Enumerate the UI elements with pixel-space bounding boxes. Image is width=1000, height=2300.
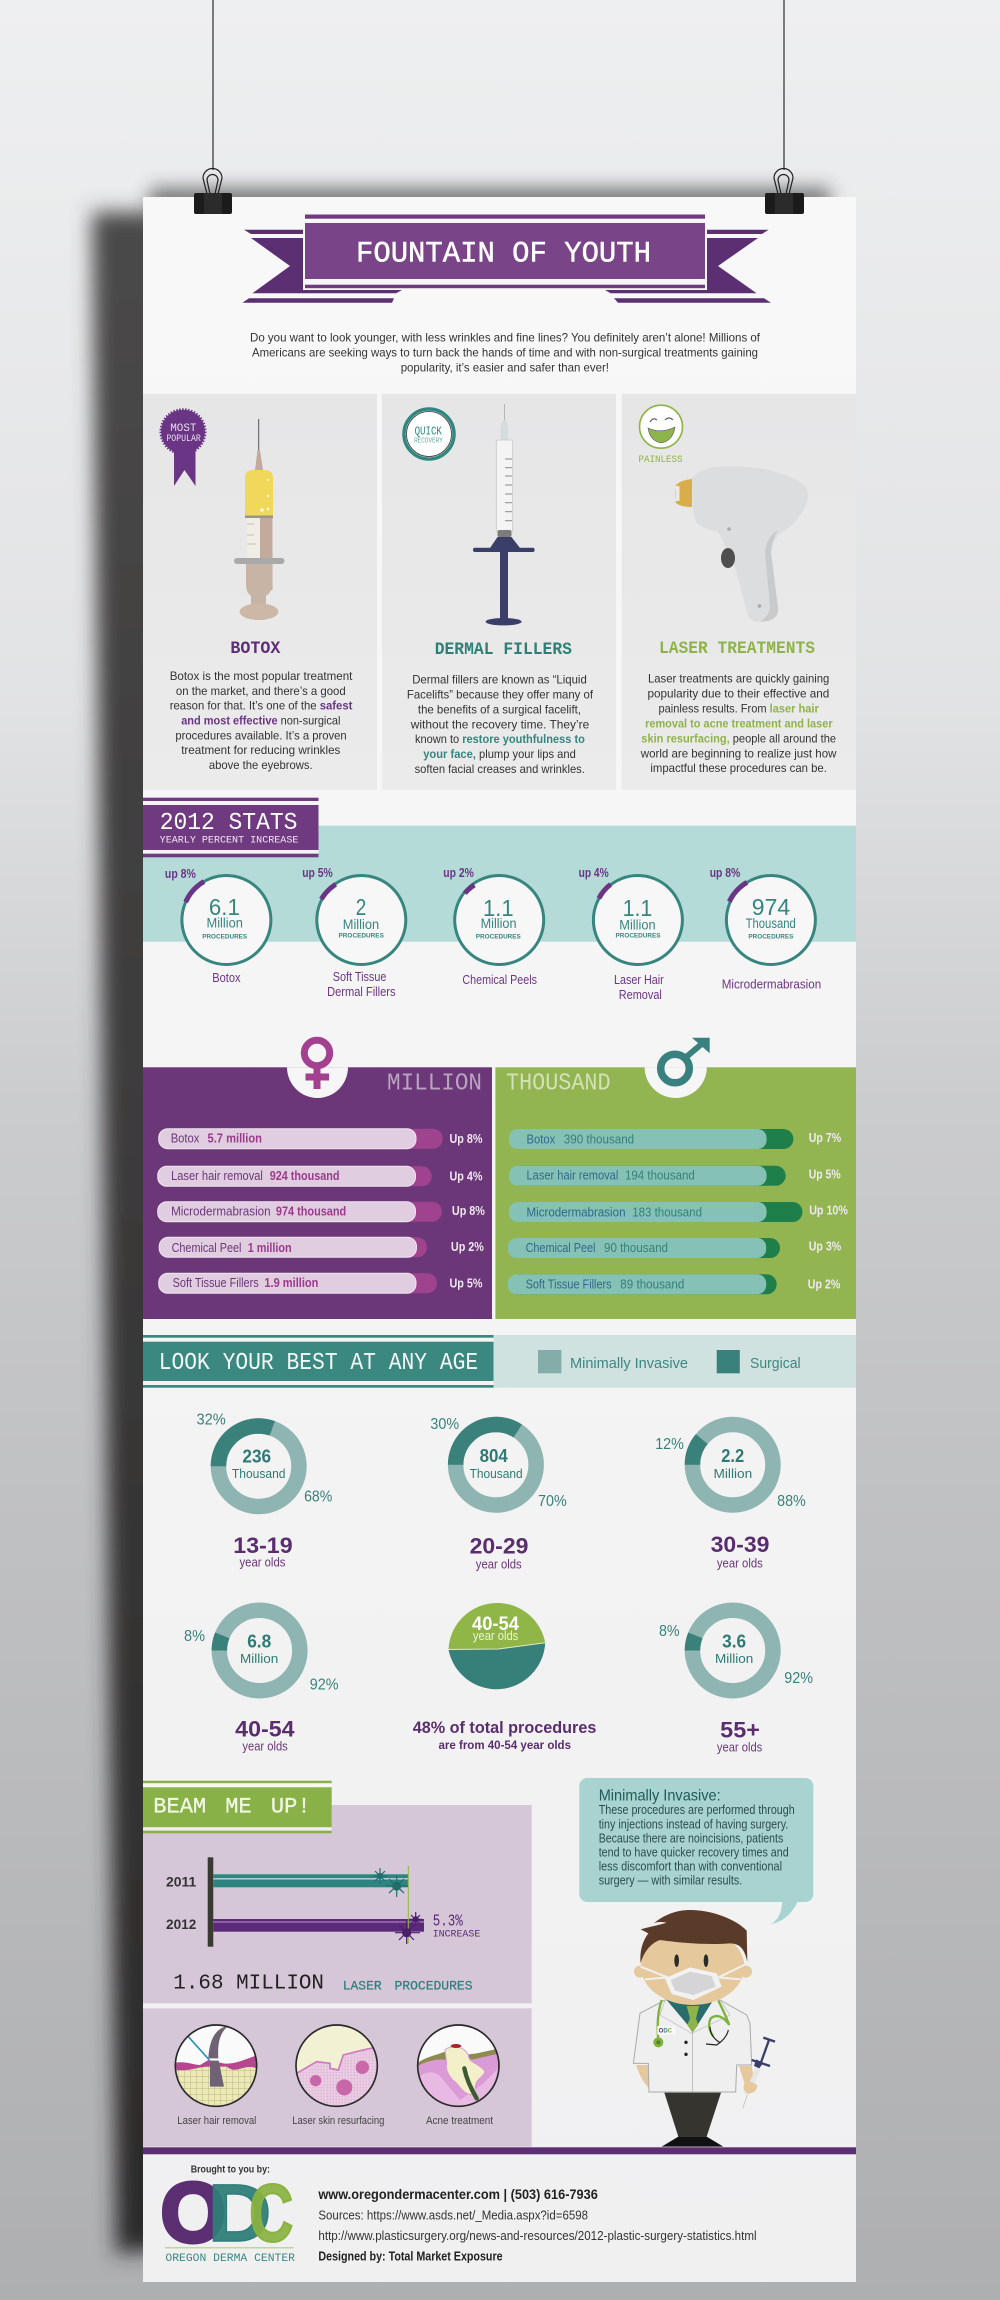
icon: laser device (675, 466, 808, 622)
drop shadow above poster (150, 188, 830, 210)
bar: laser hair men: Laser hair removal (526, 1168, 618, 1182)
legend (538, 1350, 801, 1373)
bar: botox men: Up 7% (809, 1130, 842, 1145)
stat: soft tissue dermal fillers (302, 866, 406, 999)
donut: 55 plus: 8% (659, 1623, 680, 1640)
bar: microdermabrasion women: Microdermabrasion (171, 1204, 271, 1218)
footer logo: D (208, 2168, 272, 2259)
stats header banner: 2012 STATS (160, 810, 297, 837)
stat: chemical peels: 1.1 (483, 895, 514, 921)
bar: laser hair women: 924 thousand (270, 1169, 340, 1183)
laser description: Laser treatments are quickly gaining (648, 672, 829, 686)
donut: 30-39: 88% (777, 1493, 806, 1510)
donut: 40-54 (184, 1610, 339, 1754)
intro paragraph: Do you want to look younger, with less wrinkles and fine lines? You definitely aren’t alone! Millions of (250, 331, 761, 345)
footer contact and sources: www.oregondermacenter.com | (503) 616-7936 (317, 2186, 598, 2202)
stat: microdermabrasion: Thousand (746, 916, 796, 931)
illustration: doctor: ODC (659, 2028, 673, 2034)
bar: soft tissue women (159, 1273, 483, 1293)
donut: 13-19 (196, 1412, 332, 1570)
stat: botox: 6.1 (209, 894, 240, 920)
bar: chemical peel women: Chemical Peel (172, 1241, 241, 1255)
donut: 55 plus: Million (715, 1651, 753, 1666)
donut: 40-54: Million (240, 1651, 278, 1666)
icon: female symbol (304, 1040, 330, 1089)
treatment labels: Acne treatment (426, 2115, 493, 2127)
dermal description: soften facial creases and wrinkles. (415, 762, 585, 776)
bar: soft tissue women: Up 5% (450, 1276, 483, 1290)
treatment labels: Laser skin resurfacing (292, 2115, 384, 2127)
callout: minimally invasive speech bubble: less discomfort than with conventional (599, 1859, 782, 1873)
footer contact and sources: http://www.plasticsurgery.org/news-and-resources/2012-plastic-surgery-statistics.html (318, 2229, 757, 2243)
badge: most popular: MOST (170, 423, 197, 435)
donut: 20-29: year olds (476, 1557, 522, 1571)
donut: 40-54: 40-54 (235, 1716, 295, 1741)
bar: soft tissue men: 89 thousand (620, 1278, 684, 1292)
footer contact and sources: Designed by: Total Market Exposure (318, 2250, 503, 2264)
section: 2012 stats (143, 798, 856, 1002)
dermal description: Dermal fillers are known as “Liquid (412, 672, 587, 686)
bar: chemical peel men: Up 3% (809, 1239, 842, 1254)
donut: 30-39: year olds (717, 1556, 763, 1570)
stat: chemical peels: up 2% (443, 866, 474, 880)
badge: most popular: POPULAR (166, 434, 201, 445)
legend: Minimally Invasive (570, 1355, 688, 1372)
binder clip right (765, 169, 804, 214)
callout: minimally invasive speech bubble: Because there are noincisions, patients (599, 1831, 783, 1845)
bar: chemical peel men: Chemical Peel (526, 1241, 595, 1255)
stat: laser hair removal: Removal (619, 987, 662, 1002)
stat: botox: PROCEDURES (202, 933, 248, 940)
pie: 48 percent of procedures: 40-54 (472, 1614, 519, 1635)
bar: soft tissue women: 1.9 million (264, 1276, 318, 1290)
callout: minimally invasive speech bubble: tend to have quicker recovery times and (599, 1845, 789, 1859)
bar: botox women (159, 1129, 483, 1149)
stat: soft tissue dermal fillers: Soft Tissue (333, 969, 386, 984)
callout: minimally invasive speech bubble (579, 1778, 813, 1924)
bar: soft tissue women: Soft Tissue Fillers (173, 1276, 259, 1290)
stat: soft tissue dermal fillers: up 5% (302, 866, 333, 880)
stat: chemical peels: PROCEDURES (476, 933, 521, 940)
panel: laser treatments (622, 394, 856, 790)
stats header banner (143, 798, 318, 857)
botox description: on the market, and there’s a good (176, 684, 346, 698)
bar: soft tissue men (508, 1274, 841, 1294)
bar: laser hair women: Laser hair removal (171, 1169, 263, 1183)
heading: botox: BOTOX (230, 639, 281, 659)
bar: microdermabrasion men: Microdermabrasion (526, 1205, 626, 1219)
dermal description: Facelifts” because they offer many of (407, 688, 594, 702)
hanging strings (213, 0, 784, 170)
intro paragraph: Americans are seeking ways to turn back the hands of time and with non-surgical treatments gaining (252, 346, 758, 360)
treatment labels: Laser hair removal (177, 2115, 256, 2127)
bar: laser hair women: Up 4% (450, 1168, 483, 1184)
drop shadow left of poster (92, 212, 170, 2254)
bar: chemical peel men (508, 1238, 842, 1258)
icon: filler syringe (473, 404, 535, 625)
stat: microdermabrasion: Microdermabrasion (722, 976, 821, 992)
icon: acne treatment (417, 2025, 500, 2108)
badge: painless smiley: PAINLESS (638, 454, 682, 466)
laser description: removal to acne treatment and laser (645, 716, 833, 730)
dermal description (407, 672, 594, 776)
panel: laser treatment types (143, 2008, 532, 2147)
donut: 13-19: 68% (304, 1488, 332, 1506)
icon: male symbol (661, 1038, 710, 1083)
section header: look your best at any age: LOOK YOUR BEST AT ANY AGE (159, 1350, 478, 1377)
laser description: world are beginning to realize just how (640, 746, 837, 760)
donut: 55 plus: 92% (784, 1670, 813, 1687)
dermal description: known to restore youthfulness to (415, 732, 585, 746)
panel: dermal fillers (382, 394, 616, 790)
bar: laser hair men (509, 1166, 841, 1186)
bar: laser hair men: Up 5% (809, 1167, 841, 1182)
bar: chemical peel men: 90 thousand (604, 1241, 668, 1255)
footer logo: OREGON DERMA CENTER (165, 2253, 295, 2265)
botox description: reason for that. It’s one of the safest (170, 699, 352, 713)
stat: chemical peels: Chemical Peels (462, 972, 537, 987)
laser description: popularity due to their effective and (648, 686, 829, 700)
stat: laser hair removal: Million (619, 918, 656, 932)
poster paper (143, 197, 856, 2282)
pie: 48 percent of procedures: are from 40-54 year olds (438, 1738, 571, 1752)
heading: laser treatments: LASER TREATMENTS (659, 639, 815, 659)
intro paragraph: popularity, it’s easier and safer than ever! (401, 361, 609, 375)
illustration: doctor (633, 1910, 775, 2147)
bar: microdermabrasion women (158, 1202, 485, 1222)
beam header banner: BEAM ME UP! (153, 1794, 311, 1820)
donut: 40-54: 92% (310, 1676, 339, 1694)
stat: microdermabrasion: PROCEDURES (748, 933, 794, 940)
panel: male statistics (495, 1038, 856, 1319)
footer logo: Brought to you by: (191, 2164, 270, 2176)
donut: 20-29 (430, 1416, 567, 1571)
badge: painless smiley (638, 405, 682, 466)
title text: FOUNTAIN OF YOUTH (356, 238, 651, 272)
bar: chemical peel women (159, 1237, 484, 1257)
icon: botox syringe (234, 419, 284, 620)
bar: chemical peel women: Up 2% (451, 1239, 484, 1254)
donut: 20-29: 804 (480, 1446, 508, 1466)
callout: minimally invasive speech bubble: Minimally Invasive: (599, 1788, 721, 1804)
stat: chemical peels: Million (481, 916, 516, 931)
pie: 48 percent of procedures (413, 1603, 596, 1752)
callout: minimally invasive speech bubble: tiny injections instead of having surgery. (599, 1817, 788, 1831)
botox description: above the eyebrows. (209, 758, 313, 772)
pie: 48 percent of procedures: 48% of total procedures (413, 1718, 596, 1737)
stat: soft tissue dermal fillers: 2 (356, 894, 366, 920)
bar: microdermabrasion women: 974 thousand (276, 1204, 346, 1218)
stat: laser hair removal: up 4% (579, 866, 609, 880)
bar: microdermabrasion women: Up 8% (452, 1203, 485, 1218)
botox description (170, 669, 353, 772)
callout: minimally invasive speech bubble: These procedures are performed through (599, 1803, 795, 1817)
title ribbon (242, 214, 771, 303)
stat: soft tissue dermal fillers: PROCEDURES (338, 933, 385, 940)
footer rule (143, 2147, 856, 2154)
stat: microdermabrasion: 974 (752, 894, 790, 920)
stat: laser hair removal: PROCEDURES (616, 932, 661, 939)
laser bar chart: 5.3% (433, 1912, 463, 1932)
treatment labels (177, 2115, 493, 2127)
dermal description: your face, plump your lips and (423, 747, 576, 761)
stat: botox: Botox (212, 970, 241, 985)
donut: 30-39: 12% (655, 1436, 684, 1453)
bar: botox women: Botox (171, 1132, 200, 1146)
donut: 13-19: year olds (240, 1556, 285, 1570)
callout: minimally invasive speech bubble: surgery — with similar results. (599, 1873, 742, 1887)
bar: botox women: Up 8% (450, 1131, 483, 1146)
donut: 55 plus: 55+ (720, 1718, 760, 1743)
stat: chemical peels (443, 866, 544, 987)
badge: quick recovery (404, 409, 454, 459)
dermal description: the benefits of a surgical facelift, (418, 702, 581, 716)
laser description: skin resurfacing, people all around the (641, 731, 836, 745)
panel: beam me up chart (143, 1781, 532, 2003)
stat: botox: Million (206, 916, 243, 930)
pie: 48 percent of procedures: year olds (473, 1629, 518, 1643)
donut: 30-39: 30-39 (711, 1532, 769, 1557)
bar: microdermabrasion men: 183 thousand (632, 1205, 702, 1219)
bar: botox men: Botox (526, 1132, 556, 1146)
icon: laser skin resurfacing (296, 2025, 378, 2107)
donut: 13-19: Thousand (232, 1466, 286, 1481)
stat: laser hair removal: Laser Hair (614, 972, 664, 987)
stat: microdermabrasion (710, 866, 821, 992)
laser description: painless results. From laser hair (658, 701, 819, 715)
donut: 30-39: Million (714, 1466, 752, 1481)
donut: 40-54: 8% (184, 1628, 205, 1645)
donut: 55 plus: 3.6 (722, 1632, 746, 1652)
donut: 20-29: 20-29 (470, 1534, 528, 1559)
beam header banner (143, 1781, 332, 1833)
laser description (640, 672, 837, 775)
badge: quick recovery: RECOVERY (414, 438, 443, 446)
dermal description: without the recovery time. They’re (410, 718, 590, 732)
donut: 20-29: 70% (538, 1493, 567, 1510)
donut: 13-19: 32% (196, 1412, 226, 1428)
bar: microdermabrasion men (509, 1202, 848, 1222)
laser procedure count: LASER PROCEDURES (343, 1978, 473, 1994)
botox description: treatment for reducing wrinkles (181, 743, 340, 757)
stats header banner: YEARLY PERCENT INCREASE (160, 836, 298, 846)
donut: 40-54: 6.8 (247, 1632, 271, 1652)
footer logo: C (249, 2167, 293, 2259)
donut: 55 plus: year olds (717, 1740, 762, 1754)
panel: botox (143, 394, 377, 790)
donut: 30-39 (655, 1425, 806, 1570)
botox description: Botox is the most popular treatment (170, 669, 353, 683)
botox description: procedures available. It’s a proven (175, 728, 347, 742)
donut: 13-19: 13-19 (233, 1533, 293, 1558)
stat: laser hair removal: 1.1 (623, 895, 652, 921)
bar: botox women: 5.7 million (208, 1132, 262, 1146)
bar: soft tissue men: Soft Tissue Fillers (526, 1278, 612, 1292)
icon: laser hair removal (173, 2025, 260, 2108)
stat: botox: up 8% (165, 867, 196, 881)
laser description: impactful these procedures can be. (650, 761, 827, 775)
laser procedure count: 1.68 MILLION (173, 1972, 324, 1996)
footer contact and sources: Sources: https://www.asds.net/_Media.aspx?id=6598 (318, 2208, 588, 2222)
footer contact and sources (317, 2186, 757, 2264)
donut: 40-54: year olds (242, 1740, 288, 1754)
laser bar chart: INCREASE (433, 1928, 480, 1940)
stat: microdermabrasion: up 8% (710, 866, 740, 880)
stat: soft tissue dermal fillers: Million (343, 917, 379, 932)
bar: laser hair men: 194 thousand (625, 1168, 695, 1182)
donut: 20-29: Thousand (470, 1466, 523, 1481)
laser bar chart: 2011 (166, 1874, 197, 1890)
donut: 30-39: 2.2 (721, 1446, 744, 1466)
donut: 55 plus (659, 1610, 813, 1754)
panel: female statistics (143, 1040, 492, 1319)
label: thousand: THOUSAND (506, 1070, 610, 1098)
badge: most popular (160, 409, 206, 486)
heading: dermal fillers: DERMAL FILLERS (435, 640, 572, 660)
laser bar chart: 2012 (166, 1917, 196, 1932)
bar: soft tissue men: Up 2% (808, 1276, 841, 1291)
laser bar chart (166, 1857, 480, 1947)
stat: laser hair removal (579, 866, 682, 1002)
donut: 20-29: 30% (430, 1416, 459, 1433)
bar: botox men: 390 thousand (564, 1132, 634, 1146)
binder clip left (194, 169, 232, 214)
footer logo: O (160, 2166, 226, 2260)
stat: soft tissue dermal fillers: Dermal Fillers (327, 984, 396, 999)
bar: botox men (509, 1129, 842, 1149)
bar: microdermabrasion men: Up 10% (809, 1203, 848, 1218)
botox description: and most effective non-surgical (181, 714, 340, 728)
section header: look your best at any age (143, 1335, 856, 1388)
bar: chemical peel women: 1 million (248, 1241, 292, 1255)
badge: quick recovery: QUICK (415, 426, 442, 438)
donut: 13-19: 236 (242, 1446, 271, 1466)
stat: botox (165, 867, 271, 985)
bar: laser hair women (158, 1166, 483, 1186)
intro paragraph (250, 331, 761, 375)
legend: Surgical (750, 1355, 801, 1372)
label: million: MILLION (387, 1070, 482, 1098)
footer logo (160, 2164, 295, 2265)
laser procedure count (173, 1972, 473, 1996)
